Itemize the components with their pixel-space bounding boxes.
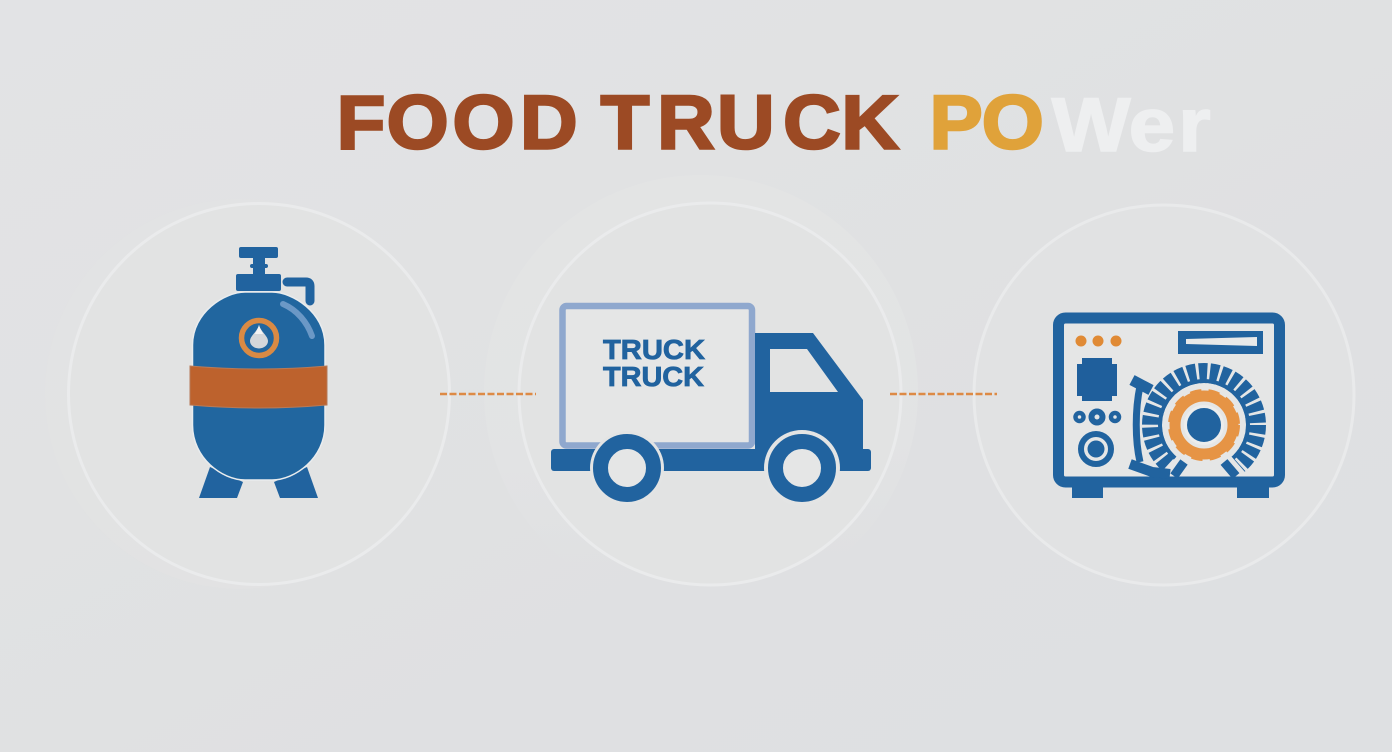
icon: generator — [1058, 318, 1280, 498]
cargo label: TRUCK — [603, 361, 704, 392]
tank valve — [236, 247, 310, 301]
control square — [1077, 358, 1117, 401]
gauge with drop — [242, 320, 276, 356]
bracket — [1130, 380, 1170, 474]
cargo label — [603, 334, 705, 392]
tank body — [192, 292, 325, 480]
icon: propane tank — [190, 247, 327, 498]
large dial — [1081, 434, 1111, 464]
indicator dots — [1076, 336, 1122, 346]
arrow: dashed connector left — [440, 393, 536, 395]
panel: truck circle — [484, 175, 918, 609]
cargo label: TRUCK — [603, 334, 705, 365]
tank legs — [199, 467, 318, 498]
panel: propane tank circle — [45, 199, 450, 589]
generator feet — [1072, 485, 1269, 498]
cab — [755, 333, 863, 450]
title: Wer — [1052, 83, 1211, 167]
gear hub — [1186, 406, 1222, 444]
cargo box — [562, 306, 752, 446]
display slot — [1178, 331, 1263, 354]
title: FOOD TRUCK — [0, 79, 899, 165]
front wheel — [764, 430, 840, 506]
panel: generator circle — [974, 205, 1354, 585]
generator frame — [1058, 318, 1280, 482]
stator fins — [1150, 373, 1260, 487]
rear wheel — [590, 431, 664, 505]
icon: delivery truck — [551, 306, 871, 506]
title: PO — [930, 79, 1044, 165]
arrow: dashed connector right — [890, 393, 997, 395]
tank band — [190, 366, 327, 408]
chassis — [551, 449, 871, 471]
small knobs — [1076, 412, 1119, 422]
tank highlight — [283, 304, 312, 336]
orange gear — [1170, 392, 1238, 458]
